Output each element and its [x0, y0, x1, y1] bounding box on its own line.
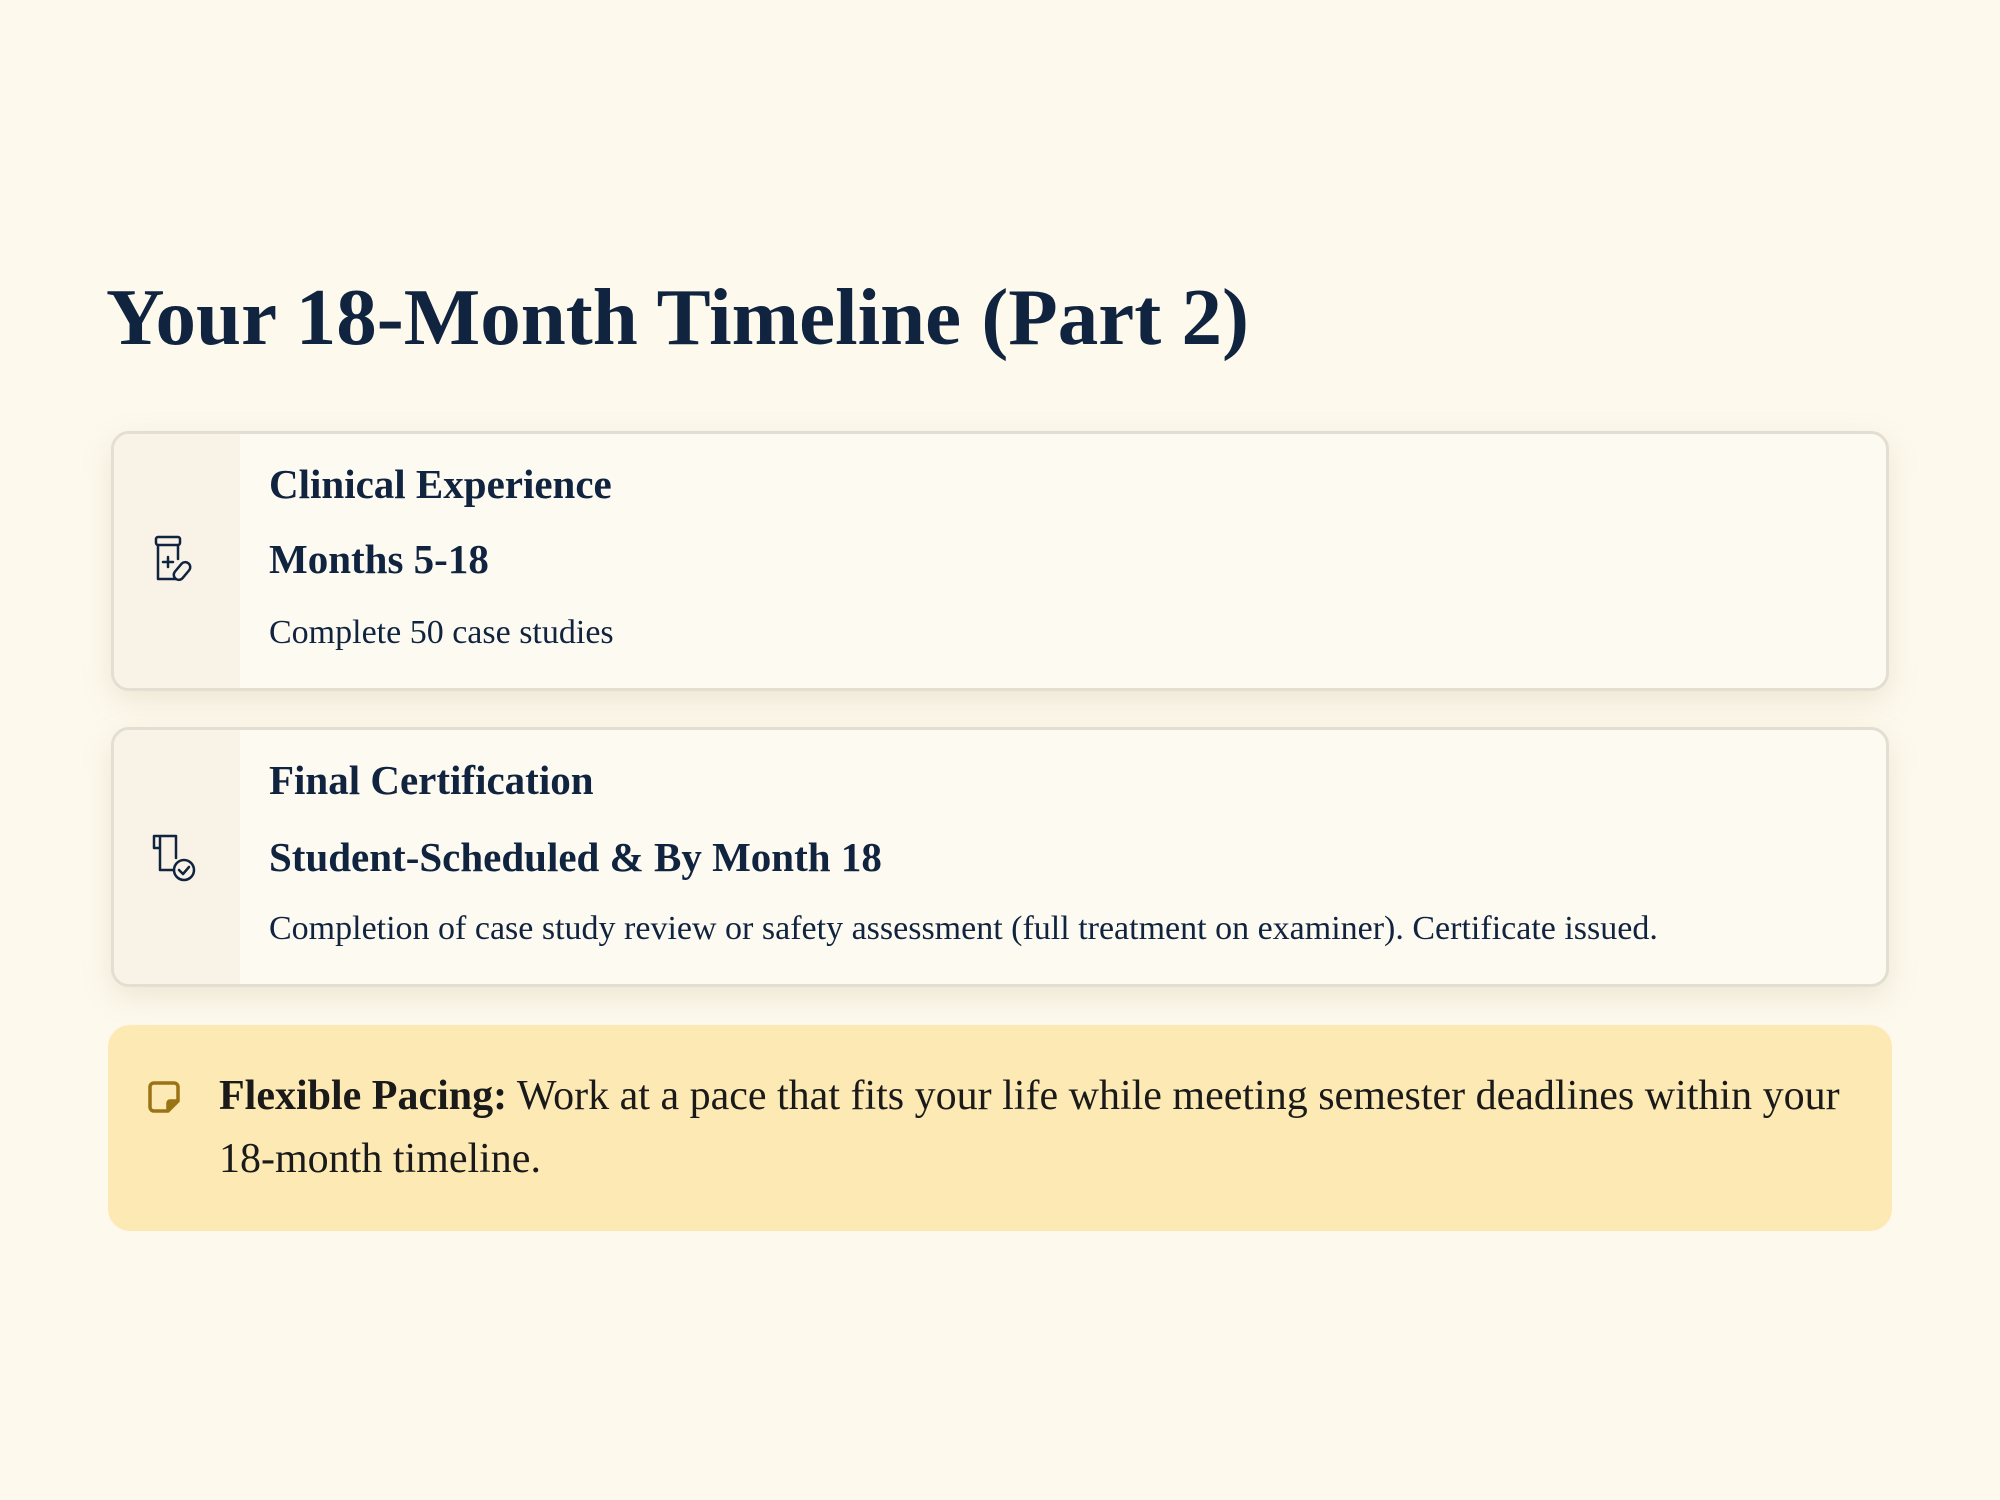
icon: scroll with check: [152, 834, 196, 882]
title: Your 18-Month Timeline (Part 2): [106, 272, 1249, 362]
description: Completion of case study review or safety assessment (full treatment on examiner). Certificate issued.: [269, 910, 1658, 947]
callout: flexible pacing: [108, 1025, 1892, 1231]
subheading: Student-Scheduled & By Month 18: [269, 834, 882, 880]
icon: note: [148, 1081, 180, 1113]
subheading: Months 5-18: [269, 536, 489, 582]
panel: final certification: [111, 727, 1889, 987]
heading: Final Certification: [269, 757, 594, 803]
callout text: Flexible Pacing: Work at a pace that fits your life while meeting semester deadlines within your 18-month timeline.: [219, 1073, 1840, 1182]
heading: Clinical Experience: [269, 461, 612, 507]
icon: medicine bottle: [154, 536, 192, 582]
description: Complete 50 case studies: [269, 614, 614, 651]
panel: clinical experience: [111, 431, 1889, 691]
